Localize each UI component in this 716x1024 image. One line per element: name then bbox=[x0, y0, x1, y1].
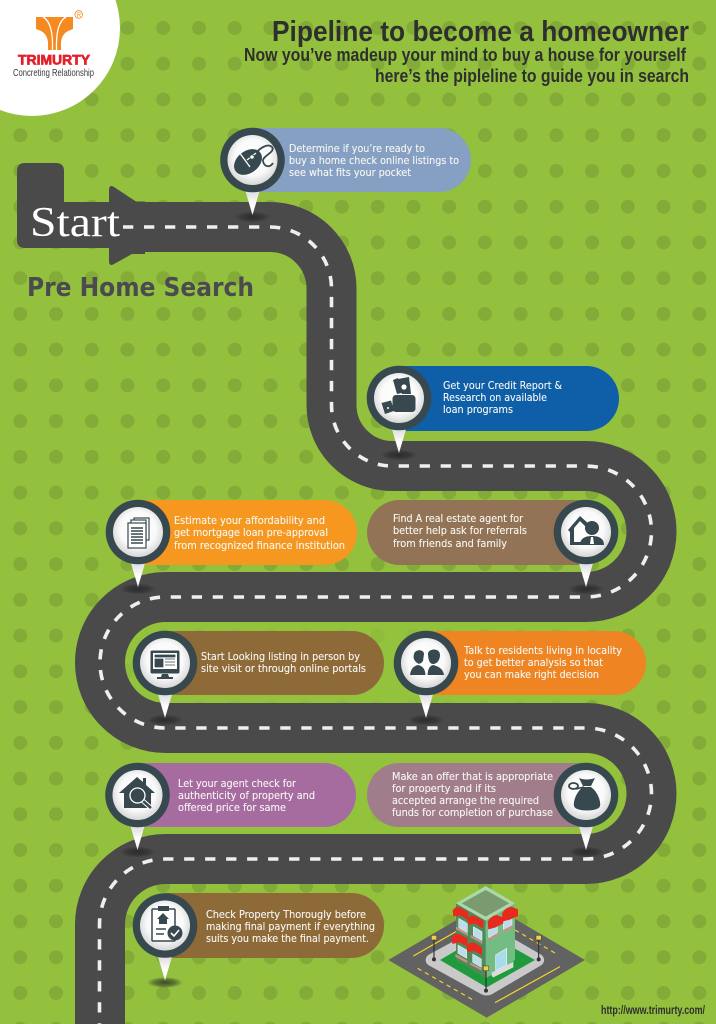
icon: mouse bbox=[229, 144, 273, 180]
step 4: real estate agent bbox=[367, 500, 618, 594]
step 7: agent check: authenticity of property and bbox=[178, 790, 315, 802]
road bbox=[17, 163, 652, 1024]
icon: house with magnifier bbox=[119, 777, 155, 808]
icon: two people bbox=[410, 649, 444, 675]
step 6: talk to residents bbox=[394, 631, 646, 726]
step 1: readiness bbox=[220, 128, 471, 222]
step 7: agent check: offered price for same bbox=[178, 802, 286, 814]
logo badge: TRIMURTY bbox=[18, 52, 91, 68]
start label: Start bbox=[30, 200, 120, 246]
icon: monitor bbox=[150, 650, 180, 679]
step 2: credit report: Get your Credit Report & bbox=[443, 380, 562, 392]
section heading: Pre Home Search bbox=[27, 273, 254, 303]
step 8: make an offer bbox=[367, 763, 618, 858]
step 4: real estate agent: from friends and family bbox=[393, 538, 507, 550]
illustration: isometric building bbox=[388, 886, 585, 1018]
icon: agent with house bbox=[568, 516, 604, 545]
step 1: readiness: Determine if you’re ready to bbox=[289, 143, 425, 155]
step 8: make an offer: for property and if its bbox=[392, 783, 496, 795]
step 2: credit report bbox=[367, 366, 619, 460]
icon: documents bbox=[128, 518, 149, 548]
title bbox=[244, 16, 689, 86]
step 9: final check: Check Property Thorougly before bbox=[206, 909, 366, 921]
step 6: talk to residents: Talk to residents living in locality bbox=[463, 645, 622, 657]
step 3: affordability: get mortgage loan pre-approval bbox=[174, 527, 328, 539]
step 2: credit report: Research on available bbox=[443, 392, 547, 404]
icon: money in hand bbox=[382, 377, 416, 414]
step 1: readiness: buy a home check online listings to bbox=[289, 155, 459, 167]
step 9: final check: making final payment if everything bbox=[206, 921, 375, 933]
logo badge: R bbox=[77, 13, 82, 19]
logo badge: Concreting Relationship bbox=[13, 67, 94, 79]
step 3: affordability: from recognized finance institution bbox=[174, 540, 345, 552]
step 5: listings bbox=[133, 631, 384, 726]
step 7: agent check: Let your agent check for bbox=[178, 778, 297, 790]
step 6: talk to residents: to get better analysis so that bbox=[464, 657, 603, 669]
step 5: listings: Start Looking listing in person by bbox=[201, 651, 360, 663]
step 6: talk to residents: you can make right decision bbox=[464, 669, 599, 681]
step 9: final check bbox=[133, 893, 384, 988]
step 8: make an offer: Make an offer that is appropriate bbox=[392, 771, 553, 783]
title: Pipeline to become a homeowner bbox=[272, 16, 689, 48]
step 3: affordability bbox=[106, 500, 357, 594]
step 4: real estate agent: Find A real estate agent for bbox=[393, 513, 524, 525]
step 5: listings: site visit or through online portals bbox=[201, 663, 366, 675]
step 4: real estate agent: better help ask for referrals bbox=[393, 525, 527, 537]
step 8: make an offer: funds for completion of purchase bbox=[392, 807, 553, 819]
step 8: make an offer: accepted arrange the required bbox=[392, 795, 539, 807]
step 9: final check: suits you make the final payment. bbox=[206, 933, 369, 945]
step 1: readiness: see what fits your pocket bbox=[289, 167, 411, 179]
icon: clipboard with check bbox=[152, 906, 182, 941]
step 2: credit report: loan programs bbox=[443, 404, 513, 416]
logo badge bbox=[0, 0, 120, 116]
icon: money bag bbox=[569, 778, 600, 810]
step 3: affordability: Estimate your affordability and bbox=[174, 515, 325, 527]
step 7: agent check bbox=[105, 763, 356, 858]
